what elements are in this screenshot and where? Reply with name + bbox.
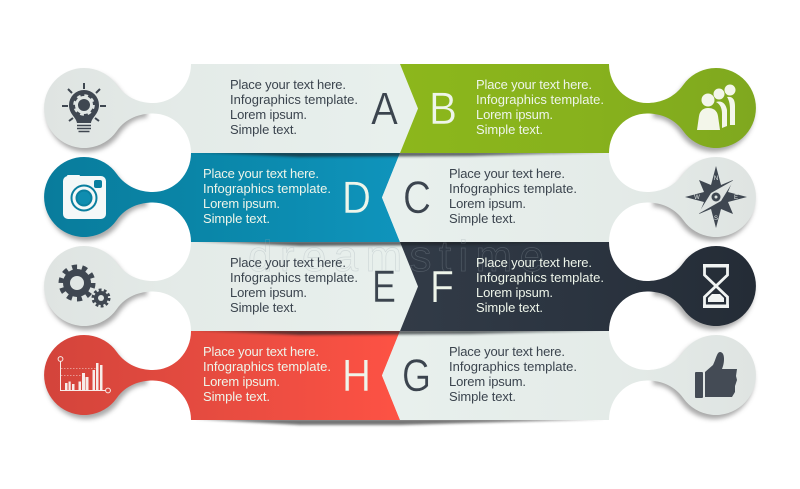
text block E: Place your text here.: [230, 255, 346, 270]
text block C: Lorem ipsum.: [449, 196, 526, 211]
letter C: C: [403, 172, 431, 223]
letter G: G: [402, 350, 431, 401]
text block G: Infographics template.: [449, 359, 577, 374]
text block G: Simple text.: [449, 389, 516, 404]
text block E: Infographics template.: [230, 270, 358, 285]
panel A: band and bulb: [44, 64, 418, 153]
text block G: [449, 344, 577, 404]
text block F: Infographics template.: [476, 270, 604, 285]
text block E: [230, 255, 358, 315]
panel G: band and bulb: [382, 331, 756, 420]
text block E: Lorem ipsum.: [230, 285, 307, 300]
text block D: Infographics template.: [203, 181, 331, 196]
icon: compass: N: [714, 176, 718, 182]
text block H: Lorem ipsum.: [203, 374, 280, 389]
panel E: band and bulb: [44, 242, 418, 331]
text block H: Simple text.: [203, 389, 270, 404]
text block A: Simple text.: [230, 122, 297, 137]
text block F: Place your text here.: [476, 255, 592, 270]
icon: compass: W: [694, 195, 700, 201]
letter F: F: [430, 261, 454, 312]
icon: compass: E: [734, 195, 738, 201]
text block H: Infographics template.: [203, 359, 331, 374]
icon: thumbs up: [695, 352, 737, 398]
text block C: Infographics template.: [449, 181, 577, 196]
letter A: A: [371, 83, 398, 134]
text block H: Place your text here.: [203, 344, 319, 359]
icon: camera: [63, 175, 106, 219]
icon: people: [697, 84, 736, 130]
text block D: [203, 166, 331, 226]
letter H: H: [342, 350, 371, 401]
watermark: dreamstime: [248, 232, 544, 281]
text block B: Lorem ipsum.: [476, 107, 553, 122]
text block E: Simple text.: [230, 300, 297, 315]
text block F: Lorem ipsum.: [476, 285, 553, 300]
bottom shadow under last row: [195, 419, 605, 425]
letter D: D: [342, 172, 371, 223]
panel C: band and bulb: [382, 153, 756, 242]
icon: gears: [61, 267, 109, 306]
text block D: Place your text here.: [203, 166, 319, 181]
panel H: band and bulb: [44, 331, 400, 420]
text block B: Infographics template.: [476, 92, 604, 107]
text block H: [203, 344, 331, 404]
text block D: Lorem ipsum.: [203, 196, 280, 211]
text block G: Lorem ipsum.: [449, 374, 526, 389]
text block B: [476, 77, 604, 137]
letter B: B: [429, 83, 457, 134]
text block B: Simple text.: [476, 122, 543, 137]
text block G: Place your text here.: [449, 344, 565, 359]
text block C: [449, 166, 577, 226]
letter E: E: [372, 261, 396, 312]
icon: compass: [685, 166, 747, 228]
text block F: [476, 255, 604, 315]
text block B: Place your text here.: [476, 77, 592, 92]
text block C: Place your text here.: [449, 166, 565, 181]
text block A: Place your text here.: [230, 77, 346, 92]
icon: hourglass: [703, 264, 729, 308]
text block A: [230, 77, 358, 137]
text block A: Lorem ipsum.: [230, 107, 307, 122]
row shadows: [195, 152, 605, 335]
text block F: Simple text.: [476, 300, 543, 315]
icon: light bulb with gear: [62, 83, 106, 132]
panel D: band and bulb: [44, 153, 400, 242]
text block A: Infographics template.: [230, 92, 358, 107]
icon: compass: S: [714, 216, 718, 222]
panel F: band and bulb: [400, 242, 756, 331]
text block D: Simple text.: [203, 211, 270, 226]
text block C: Simple text.: [449, 211, 516, 226]
panel B: band and bulb: [400, 64, 756, 153]
icon: bar chart: [58, 357, 110, 393]
bulb drop shadows: [46, 72, 754, 419]
